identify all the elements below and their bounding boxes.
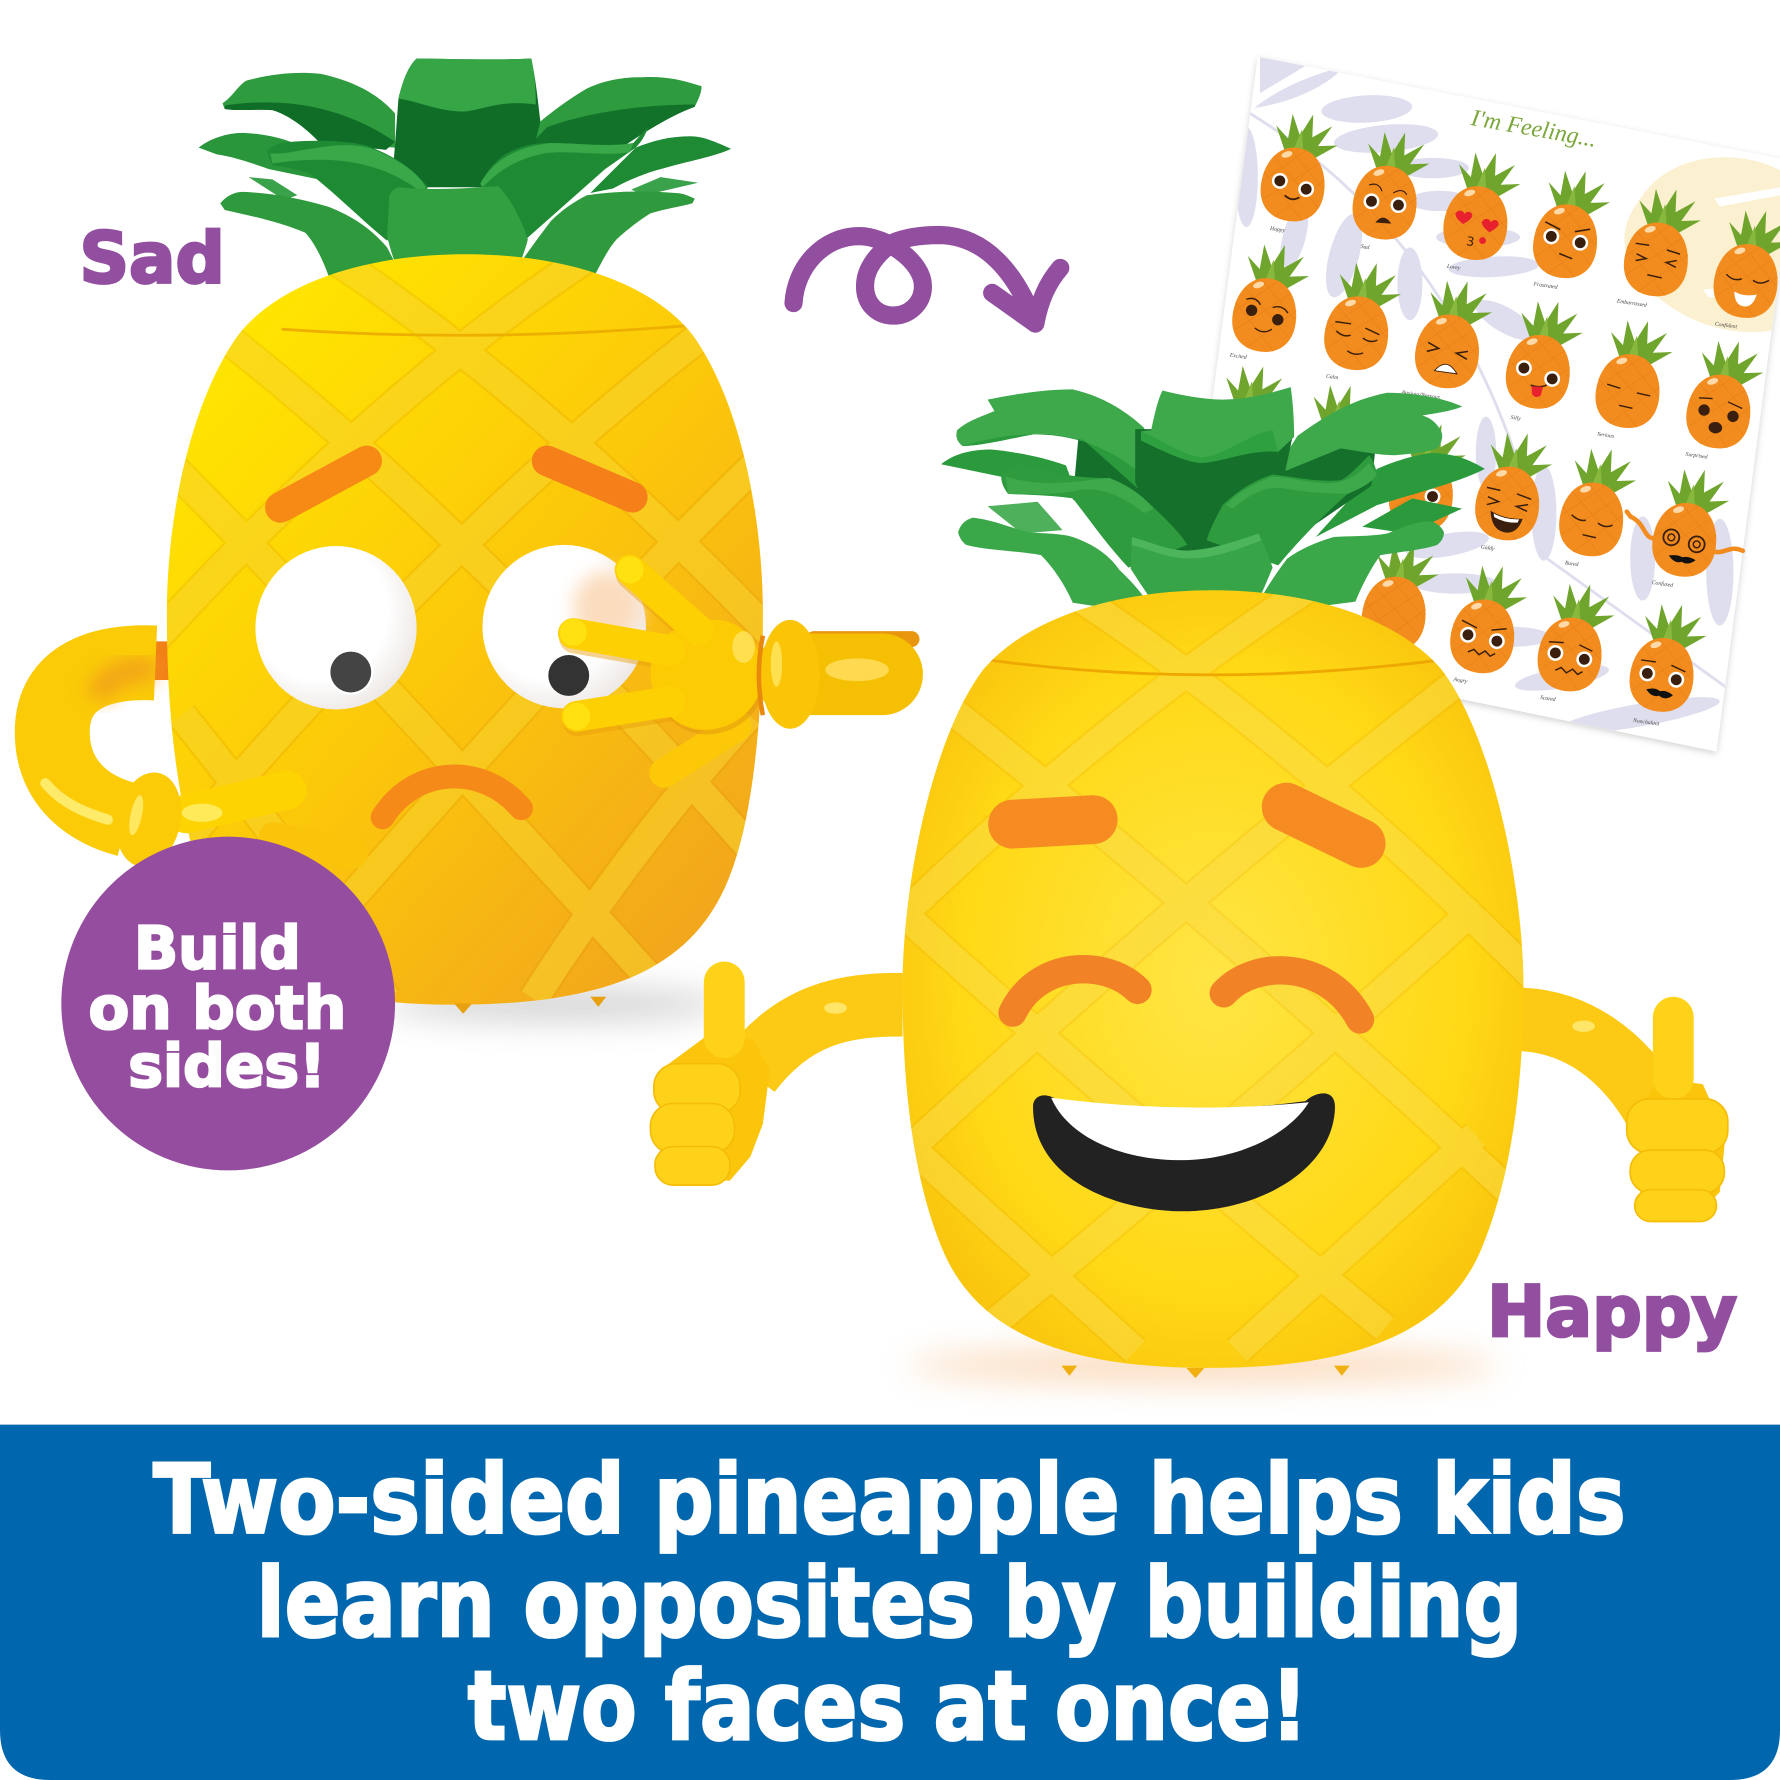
mini pineapple: serious: Serious <box>1597 432 1615 440</box>
left hand <box>108 766 353 873</box>
mini pineapple: embarrassed: Embarrassed <box>1615 298 1647 309</box>
label: Sad: Sad <box>79 218 225 300</box>
mini pineapple: sad: Sad <box>1360 244 1370 251</box>
mini pineapple: confused with arms <box>1617 460 1753 598</box>
mini pineapple: happy: Happy <box>1269 226 1286 234</box>
mini pineapple: calm <box>1318 257 1405 388</box>
mini pineapple: silly kiss: Lovey <box>1445 264 1461 272</box>
mini pineapple: confused with arms: Confused <box>1651 579 1674 589</box>
poster: I'm Feeling chart: I'm Feeling... <box>1468 105 1598 153</box>
mini pineapple: silly: Silly <box>1510 415 1522 422</box>
left arm loop <box>45 641 171 820</box>
mini pineapple: silly kiss: 3 <box>1465 233 1475 249</box>
eye arcs <box>1013 969 1360 1019</box>
mini pineapple: angry: Angry <box>1452 677 1468 685</box>
mini pineapple: sad <box>1347 127 1433 258</box>
banner: blue footer: two faces at once! <box>468 1651 1308 1762</box>
mini pineapple: hidden centre <box>1294 380 1379 498</box>
mini pineapple: surprised: Surprised <box>1685 452 1708 461</box>
callout: build on both sides: Build <box>134 913 301 982</box>
crown <box>199 58 731 292</box>
eyebrows <box>280 461 632 507</box>
mini pineapple: anxious: Anxious/Nervous <box>1400 389 1441 401</box>
mini pineapple: happy <box>1255 109 1341 240</box>
mouth <box>1033 1093 1335 1211</box>
mini pineapple: anxious <box>1400 274 1496 406</box>
mini pineapple: bored: Bored <box>1564 560 1579 568</box>
mini pineapple: scared <box>1532 579 1618 710</box>
banner: blue footer <box>0 1425 1780 1780</box>
banner: blue footer: learn opposites by building <box>257 1548 1522 1659</box>
mini pineapple: silly kiss <box>1437 147 1524 278</box>
mini pineapple: hidden with eye <box>1385 419 1470 536</box>
pineapple: sad side <box>45 58 920 1021</box>
body lattice <box>904 594 1524 1362</box>
mini pineapple: excited: Excited <box>1228 352 1247 361</box>
mini pineapple: hidden left <box>1207 361 1291 478</box>
mini pineapple: bored <box>1553 444 1640 574</box>
mini pineapple: confident: Confident <box>1714 320 1738 330</box>
left thumbs-up hand <box>650 962 770 1185</box>
mouth <box>383 776 521 817</box>
callout: build on both sides: sides! <box>128 1031 326 1100</box>
right hand and loop <box>560 556 920 773</box>
mini pineapple: frustrated <box>1527 165 1614 296</box>
mini pineapple: nonchalant: Nonchalant <box>1632 718 1660 728</box>
mini pineapple: partly hidden bottom <box>1357 538 1442 655</box>
mini pineapple: serious <box>1589 315 1676 446</box>
mini pineapple: giddy: Giddy <box>1480 544 1495 552</box>
mini pineapple: surprised <box>1680 336 1767 467</box>
label: Happy: Happy <box>1487 1271 1737 1353</box>
arrow: curled purple <box>794 235 1060 324</box>
mini pineapple: calm: Calm <box>1326 374 1339 381</box>
mini pineapple: embarrassed <box>1615 183 1705 315</box>
body lattice <box>148 255 783 999</box>
pineapple: happy side <box>650 387 1728 1384</box>
right thumbs-up hand <box>1627 997 1728 1221</box>
right arm <box>1521 1019 1660 1118</box>
bottom feet <box>1061 1366 1350 1378</box>
left arm <box>749 1002 902 1073</box>
mini pineapple: giddy <box>1469 428 1556 559</box>
callout: build on both sides <box>61 837 395 1170</box>
eyebrows <box>1013 807 1361 843</box>
poster: I'm Feeling chart <box>1181 57 1780 752</box>
body <box>902 590 1523 1368</box>
mini pineapple: silly <box>1499 296 1587 429</box>
body <box>167 254 763 1005</box>
mini pineapple: excited <box>1227 239 1313 368</box>
mini pineapple: nonchalant <box>1623 599 1710 732</box>
callout: build on both sides: on both <box>89 973 346 1042</box>
mini pineapple: frustrated: Frustrated <box>1532 281 1558 291</box>
mini pineapple: angry <box>1444 560 1531 691</box>
mini pineapple: confident <box>1708 205 1780 336</box>
crown <box>941 387 1485 618</box>
eyes <box>255 545 646 710</box>
mini pineapple: scared: Scared <box>1540 695 1556 703</box>
bottom feet <box>454 997 606 1014</box>
